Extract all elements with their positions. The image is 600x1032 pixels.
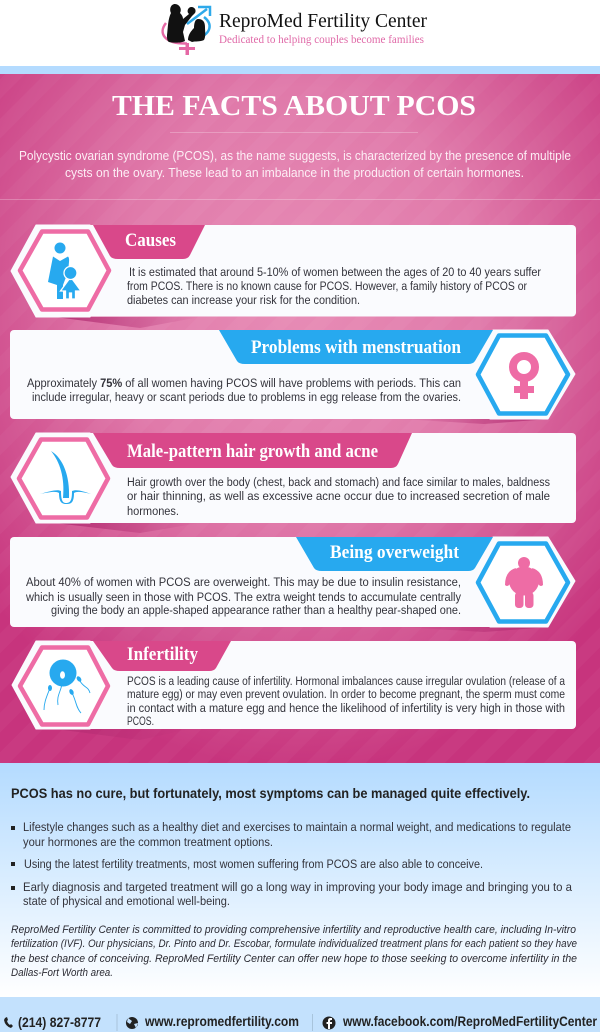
hexagon badge — [11, 225, 113, 317]
main title: THE FACTS ABOUT PCOS — [112, 90, 476, 122]
panel: infertility — [12, 641, 576, 740]
company statement — [11, 924, 577, 979]
heading: Causes — [125, 230, 176, 251]
body text: or hair thinning, as well as excessive acne occur due to increased secretion of male — [127, 489, 550, 503]
body text: hormones. — [127, 504, 179, 518]
brand name: ReproMed Fertility Center — [219, 10, 427, 32]
logo: female cross — [179, 43, 195, 55]
bullet list: state of physical and emotional well-being. — [23, 894, 230, 908]
heading: Being overweight — [330, 542, 460, 563]
company statement: Dallas-Fort Worth area. — [11, 967, 113, 979]
heading banner — [93, 225, 205, 259]
pink background panel — [0, 74, 600, 763]
hexagon badge — [11, 433, 113, 523]
company statement: ReproMed Fertility Center is committed to providing comprehensive infertility and reproductive health care, including In-vitro — [11, 924, 576, 936]
body text: Hair growth over the body (chest, back and stomach) and face similar to males, baldness — [127, 475, 550, 489]
body text: from PCOS. There is no known cause for PCOS. However, a family history of PCOS or — [127, 279, 527, 293]
tagline: Dedicated to helping couples become families — [219, 32, 424, 46]
panel: male-pattern hair growth and acne — [11, 433, 576, 533]
heading: Problems with menstruation — [251, 337, 461, 358]
icon: facebook — [322, 1016, 336, 1030]
heading banner — [93, 641, 231, 671]
body text — [127, 265, 541, 307]
icon: mother and child — [48, 242, 81, 299]
heading: Infertility — [127, 644, 198, 665]
subheading: PCOS has no cure, but fortunately, most symptoms can be managed quite effectively. — [11, 786, 530, 801]
phone number: (214) 827-8777 — [18, 1015, 101, 1030]
panel: problems with menstruation — [10, 330, 575, 424]
heading banner — [296, 537, 493, 571]
body text: in contact with a mature egg and hence the likelihood of infertility is very high in those with — [127, 701, 565, 715]
body text — [27, 376, 461, 404]
panel: being overweight — [10, 537, 575, 632]
icon: female symbol — [513, 356, 535, 399]
body text: Approximately 75% of all women having PCOS will have problems with periods. This can — [27, 376, 461, 390]
body text — [127, 674, 565, 728]
logo: male arrow — [187, 7, 210, 38]
hexagon badge — [12, 641, 113, 729]
footer contact bar — [4, 1014, 598, 1031]
logo: female symbol — [163, 23, 187, 44]
company statement: the best chance of conceiving. ReproMed Fertility Center can offer new hope to those seeking to overcome infertility in the — [11, 953, 577, 965]
body text: About 40% of women with PCOS are overweight. This may be due to insulin resistance, — [26, 575, 461, 589]
body text: giving the body an apple-shaped appearance rather than a healthy pear-shaped one. — [51, 603, 461, 617]
intro text: cysts on the ovary. These lead to an imbalance in the production of certain hormones. — [65, 165, 524, 180]
bullet list: Using the latest fertility treatments, most women suffering from PCOS are also able to conceive. — [24, 857, 483, 871]
bullet list — [11, 820, 572, 908]
logo — [163, 4, 210, 55]
body text: which is usually seen in those with PCOS. The extra weight tends to accumulate centrally — [25, 590, 462, 604]
bullet list: your hormones are the common treatment options. — [23, 835, 273, 849]
body text: It is estimated that around 5-10% of women between the ages of 20 to 40 years suffer — [129, 265, 541, 279]
body text — [127, 475, 550, 518]
hexagon badge — [470, 537, 575, 627]
heading banner — [219, 330, 493, 364]
panel: causes — [11, 225, 576, 328]
panel: management and treatment — [0, 763, 600, 1032]
icon: phone — [4, 1017, 13, 1028]
icon: globe — [126, 1017, 138, 1029]
bullet list: Early diagnosis and targeted treatment will go a long way in improving your body image and bringing you to a — [23, 880, 572, 894]
icon: overweight person — [505, 557, 543, 608]
heading banner — [93, 433, 412, 468]
icon: hair follicle — [40, 451, 91, 504]
body text — [25, 575, 462, 617]
heading: Male-pattern hair growth and acne — [127, 441, 378, 462]
logo: parents silhouettes — [167, 4, 205, 43]
body text: diabetes can increase your risk for the condition. — [127, 293, 360, 307]
body text: PCOS. — [127, 714, 154, 728]
body text: include irregular, heavy or scant periods due to problems in egg release from the ovaries. — [32, 390, 461, 404]
intro text — [19, 148, 571, 180]
website: www.repromedfertility.com — [144, 1014, 299, 1029]
icon: egg and sperm — [44, 660, 90, 713]
hexagon badge — [470, 330, 575, 419]
